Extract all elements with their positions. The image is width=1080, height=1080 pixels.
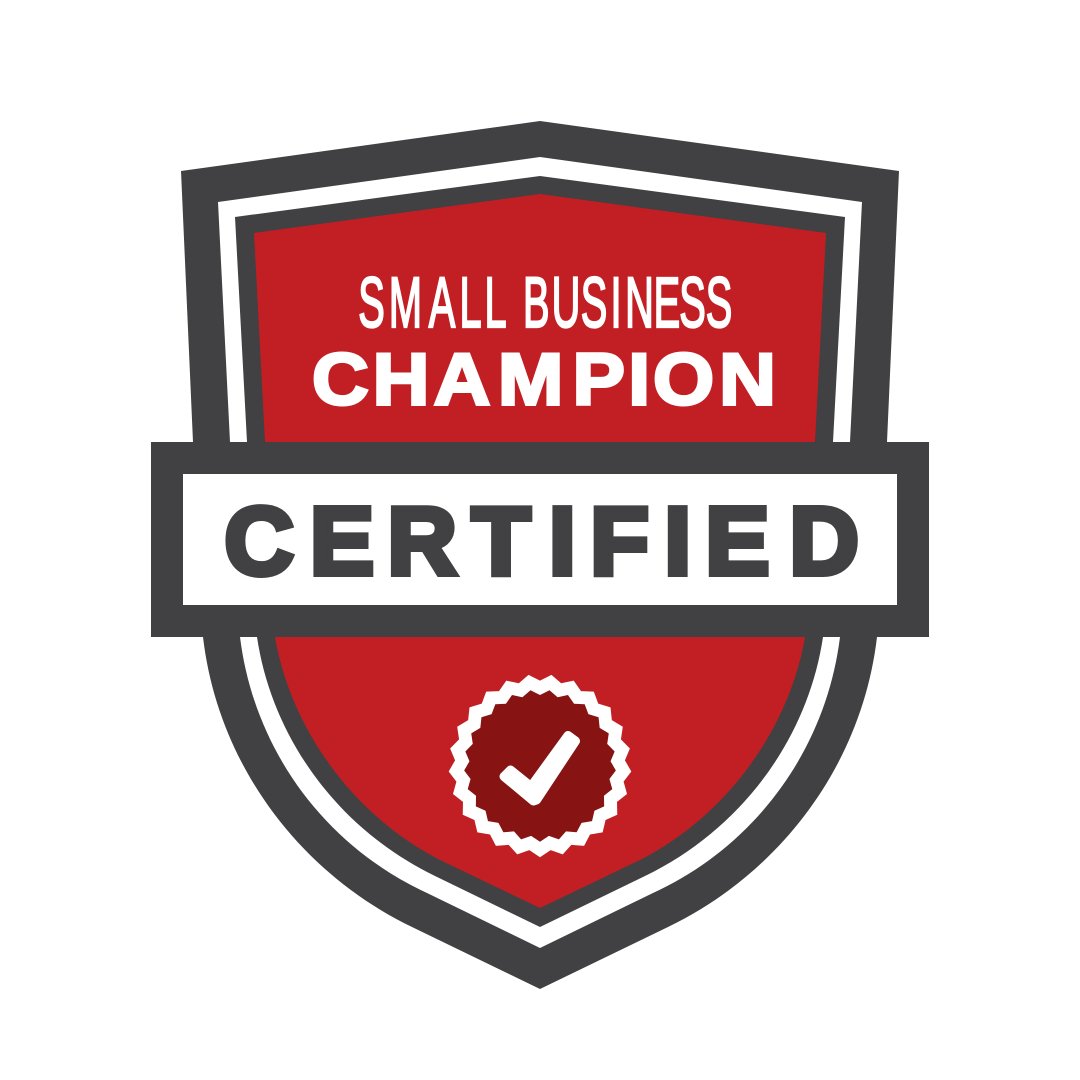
shield red field xyxy=(254,194,826,908)
shield white ring xyxy=(218,157,862,948)
seal white starburst xyxy=(449,675,631,857)
banner dark frame xyxy=(151,442,929,637)
banner xyxy=(151,442,929,637)
banner white panel xyxy=(183,474,897,605)
shield inner dark ring xyxy=(235,176,845,927)
heading: small business: SMALL BUSINESS xyxy=(358,264,732,343)
icon: certified seal xyxy=(449,675,631,857)
seal dark red starburst xyxy=(464,690,616,842)
icon: check mark xyxy=(504,736,576,801)
heading: champion: CHAMPION xyxy=(312,339,776,421)
shield xyxy=(181,121,899,989)
banner text: certified: CERTIFIED xyxy=(224,488,859,595)
shield outer dark border xyxy=(181,121,899,989)
